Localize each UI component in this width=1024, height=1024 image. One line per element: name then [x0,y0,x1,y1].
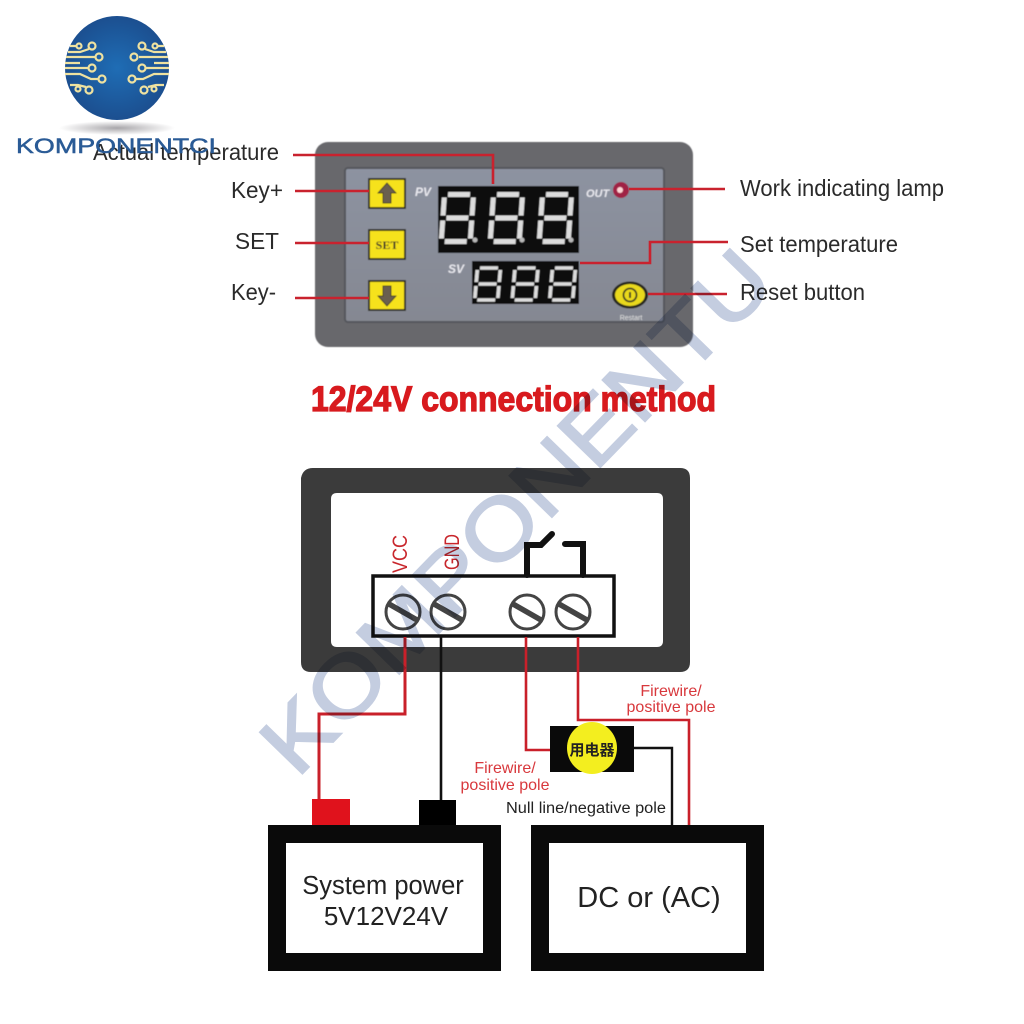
label: firewire left: positive pole [461,777,550,794]
logo [16,16,216,158]
Restart label: Restart [620,315,642,322]
reset button [612,282,648,308]
label: firewire right: Firewire/ [640,683,702,700]
label: Work indicating lamp: Work indicating lamp [740,175,944,201]
callout labels right [740,175,944,305]
box: DC or AC [540,834,755,962]
label: firewire right [627,683,716,716]
screw 2 [431,595,465,629]
VCC label: VCC [389,535,412,573]
label: Actual temperature: Actual temperature [93,139,279,165]
PV display [438,186,579,253]
load component: 用电器 [569,742,615,759]
SV display [472,261,579,304]
screw 3 [510,595,544,629]
label: firewire right: positive pole [627,699,716,716]
Key+ button [369,179,405,208]
label: Key+: Key+ [231,177,283,203]
label: null line: Null line/negative pole [506,800,666,817]
wire: firewire to load [526,637,551,750]
label: firewire left [461,760,550,794]
red battery terminal [312,799,350,826]
logo circuit traces [65,42,169,94]
label: Key-: Key- [231,279,276,305]
wire: VCC [319,637,405,800]
wires [319,637,689,825]
SV label: SV [448,262,465,276]
device face [345,168,664,322]
device photo panel [315,142,693,347]
callout labels left [93,139,283,305]
terminal block [373,576,614,636]
wire: null line [633,748,672,825]
diagram frame [301,468,690,672]
SET button: SET [376,238,398,252]
box: system power [277,834,492,962]
work lamp [613,182,629,198]
label: SET: SET [235,228,279,254]
logo disc [65,16,169,120]
box: DC or AC: DC or (AC) [577,882,721,914]
screw 1 [386,595,420,629]
logo wordmark: KOMPONENTCI [16,135,216,158]
Key- button [369,281,405,310]
OUT label: OUT [586,188,610,200]
GND label: GND [441,534,464,570]
relay contact symbol [527,534,583,575]
box: system power: System power [302,872,464,900]
black battery terminal [419,800,456,826]
label: firewire left: Firewire/ [474,760,536,777]
label: Set temperature: Set temperature [740,231,898,257]
wire: GND [440,637,442,801]
load component [550,722,634,774]
logo shadow [59,121,175,135]
PV label: PV [415,185,432,199]
box: system power: 5V12V24V [324,901,449,931]
label: Reset button: Reset button [740,279,865,305]
watermark: KOMPONENTU [242,231,791,792]
screw 4 [556,595,590,629]
callout lines [293,155,728,298]
SET button [369,230,405,259]
wire: firewire to source [578,637,689,825]
device bezel [315,142,693,347]
heading: 12/24V connection method [311,380,716,419]
